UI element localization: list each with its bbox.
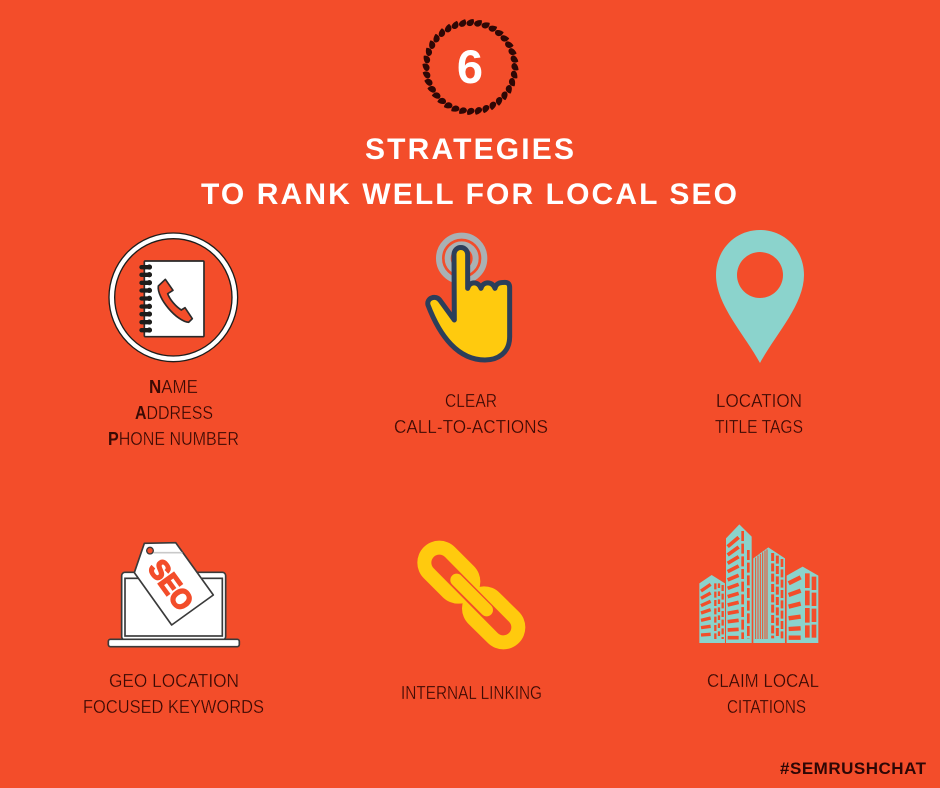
hashtag: #SEMRUSHCHAT <box>780 759 927 778</box>
label: claim local citations: CLAIM LOCAL <box>707 671 819 691</box>
label: location title tags <box>715 391 803 437</box>
label: geo location focused keywords: FOCUSED KEYWORDS <box>83 697 264 717</box>
icon: map pin <box>716 230 804 363</box>
label: clear call-to-actions: CALL-TO-ACTIONS <box>394 417 548 437</box>
label: claim local citations: CITATIONS <box>727 697 806 717</box>
title: STRATEGIES <box>365 133 574 166</box>
label: clear call-to-actions <box>394 391 548 437</box>
label: name address phone number: PHONE NUMBER <box>108 429 239 449</box>
icon: city buildings <box>699 524 818 643</box>
badge: number 6 in ring: 6 <box>457 40 483 93</box>
label: name address phone number <box>108 377 239 449</box>
title: TO RANK WELL FOR LOCAL SEO <box>201 178 737 211</box>
label: geo location focused keywords: GEO LOCATION <box>109 671 239 691</box>
label: geo location focused keywords <box>83 671 264 717</box>
icon: laptop with SEO tag: SEO <box>142 554 200 616</box>
label: location title tags: TITLE TAGS <box>715 417 803 437</box>
label: location title tags: LOCATION <box>716 391 802 411</box>
icon: address book in circle <box>112 236 235 359</box>
label: internal linking: INTERNAL LINKING <box>401 683 542 703</box>
label: clear call-to-actions: CLEAR <box>445 391 497 411</box>
icon: chain link <box>439 563 503 627</box>
label: claim local citations <box>707 671 819 717</box>
label: name address phone number: NAME <box>149 377 198 397</box>
icon: pointing hand <box>428 236 510 360</box>
title <box>201 133 737 211</box>
label: name address phone number: ADDRESS <box>135 403 213 423</box>
icon: laptop with SEO tag <box>108 543 239 647</box>
badge: number 6 in ring <box>422 19 518 115</box>
